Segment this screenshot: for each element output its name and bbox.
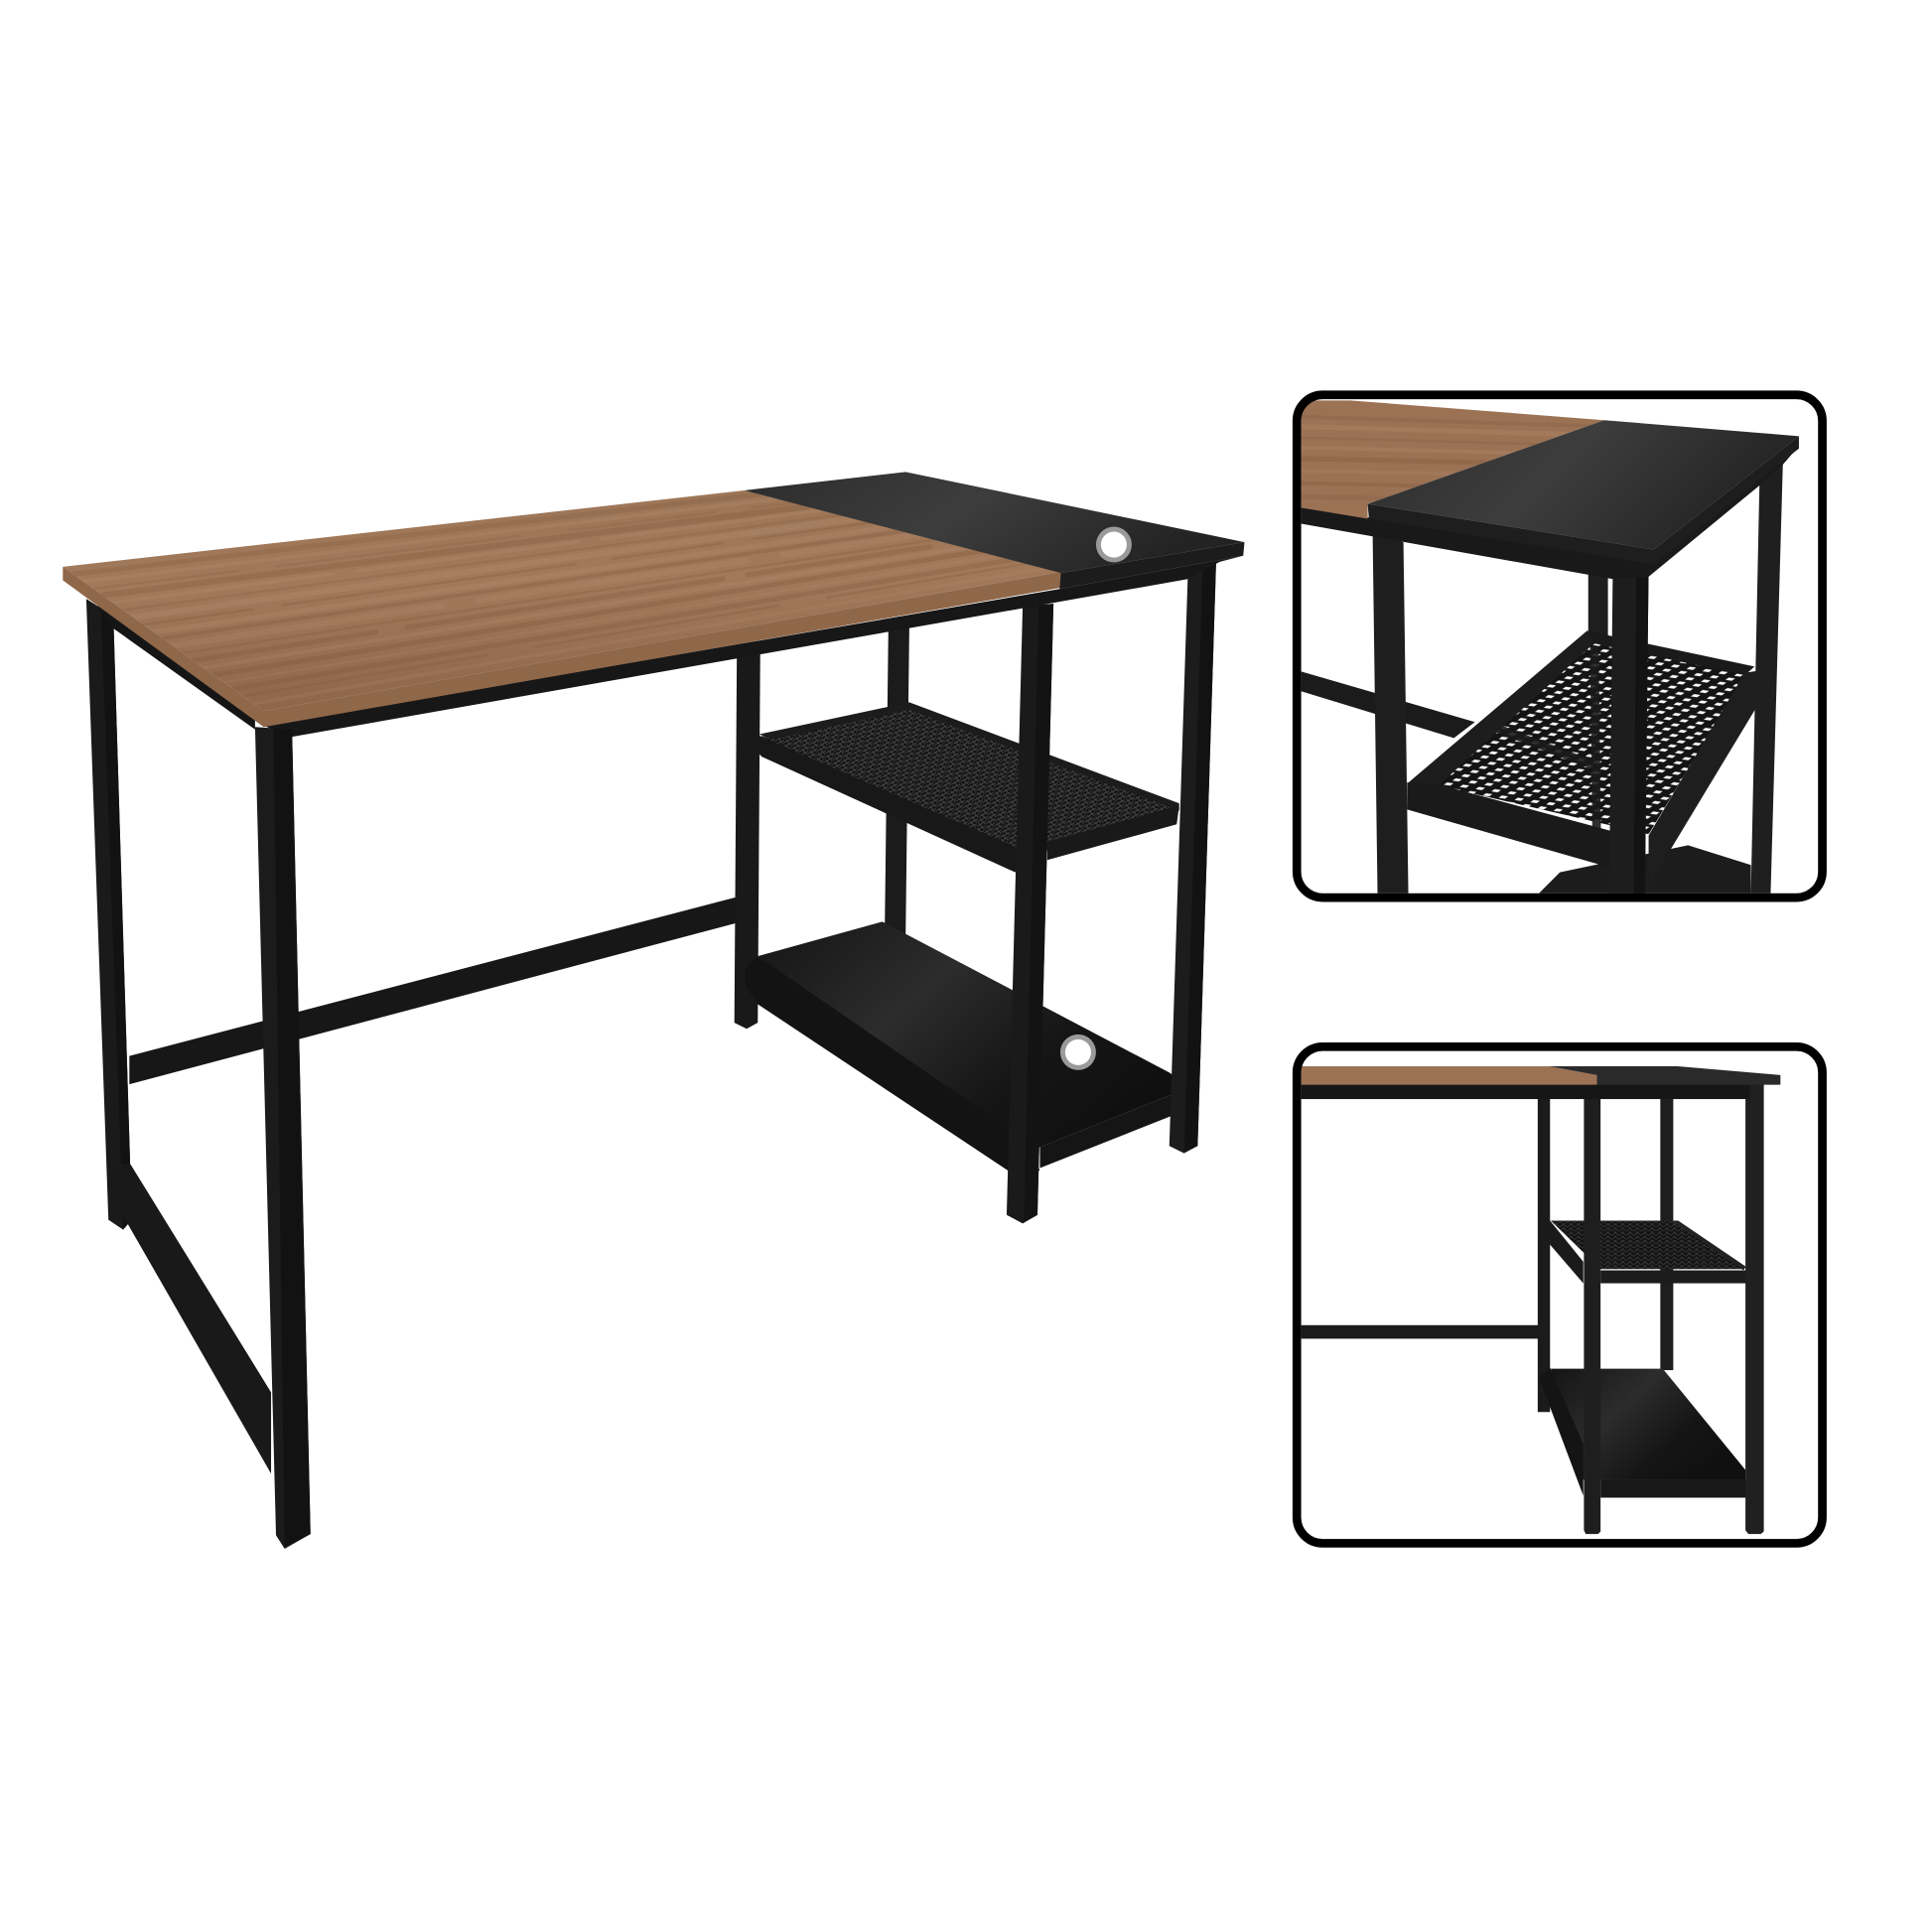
detail right leg	[1751, 462, 1783, 895]
side wood top	[1302, 1066, 1596, 1085]
hole marker on top	[1096, 527, 1132, 563]
wood top surface	[63, 490, 1062, 711]
wood edge	[63, 567, 1062, 727]
detail black top	[1368, 420, 1799, 550]
back shelf unit leg	[885, 625, 909, 936]
lower shelf board	[758, 921, 1185, 1147]
detail front leg	[1609, 563, 1649, 895]
side frame	[1297, 1046, 1823, 1543]
mesh shelf side rail	[1047, 806, 1179, 860]
side mesh surface	[1551, 1221, 1744, 1269]
detail lower shelf	[1538, 845, 1751, 895]
middle stretcher	[129, 897, 737, 1084]
panel: side detail view	[1297, 1046, 1823, 1543]
side back leg	[1660, 1098, 1673, 1370]
detail mesh support bars	[1493, 647, 1596, 850]
hole marker on lower shelf	[1060, 1035, 1096, 1070]
black top surface	[745, 472, 1244, 573]
bottom side rail	[107, 1165, 271, 1473]
detail wood top	[1302, 400, 1604, 518]
detail mesh front rail	[1407, 782, 1614, 869]
detail wood grain	[1294, 416, 1601, 499]
detail back leg	[1588, 573, 1608, 640]
detail apron	[1302, 507, 1654, 579]
panel: corner detail view	[1294, 395, 1823, 897]
mesh shelf surface	[759, 705, 1179, 863]
detail mesh back rail	[1587, 630, 1754, 675]
side inner leg	[1538, 1098, 1550, 1412]
left shelf unit leg	[735, 653, 760, 1029]
side black top	[1549, 1066, 1780, 1085]
detail left leg	[1373, 532, 1409, 895]
front left leg	[255, 727, 311, 1549]
lower shelf left rail	[746, 956, 1039, 1171]
side mesh left rail	[1550, 1221, 1584, 1283]
black top edge	[1059, 542, 1244, 589]
front shelf leg	[1007, 604, 1053, 1223]
detail right apron	[1648, 453, 1793, 577]
side right leg	[1745, 1084, 1764, 1534]
apron rail	[264, 556, 1243, 737]
main desk illustration	[63, 472, 1244, 1549]
side lower shelf board	[1551, 1369, 1745, 1480]
detail mesh right rail	[1648, 671, 1755, 854]
side stretcher	[1302, 1325, 1540, 1338]
side apron	[1302, 1084, 1749, 1099]
detail mesh left rail	[1407, 630, 1596, 788]
side lower front bar	[1600, 1480, 1746, 1498]
mesh shelf front rail	[747, 736, 1023, 873]
detail mesh surface	[1436, 642, 1746, 834]
wood grain	[72, 494, 1046, 704]
detail frame	[1297, 395, 1823, 897]
lower shelf side rail	[1039, 1089, 1185, 1169]
mesh shelf back rail	[759, 702, 1179, 811]
right shelf leg	[1170, 562, 1216, 1154]
side mesh right rail	[1672, 1221, 1746, 1271]
detail stretcher	[1302, 671, 1475, 738]
side mesh front bar	[1600, 1271, 1746, 1284]
side front leg	[1584, 1098, 1600, 1534]
back left leg	[86, 599, 132, 1230]
left side apron under top	[86, 589, 255, 730]
side lower shelf left rail	[1550, 1368, 1584, 1495]
detail black edge	[1368, 436, 1799, 564]
